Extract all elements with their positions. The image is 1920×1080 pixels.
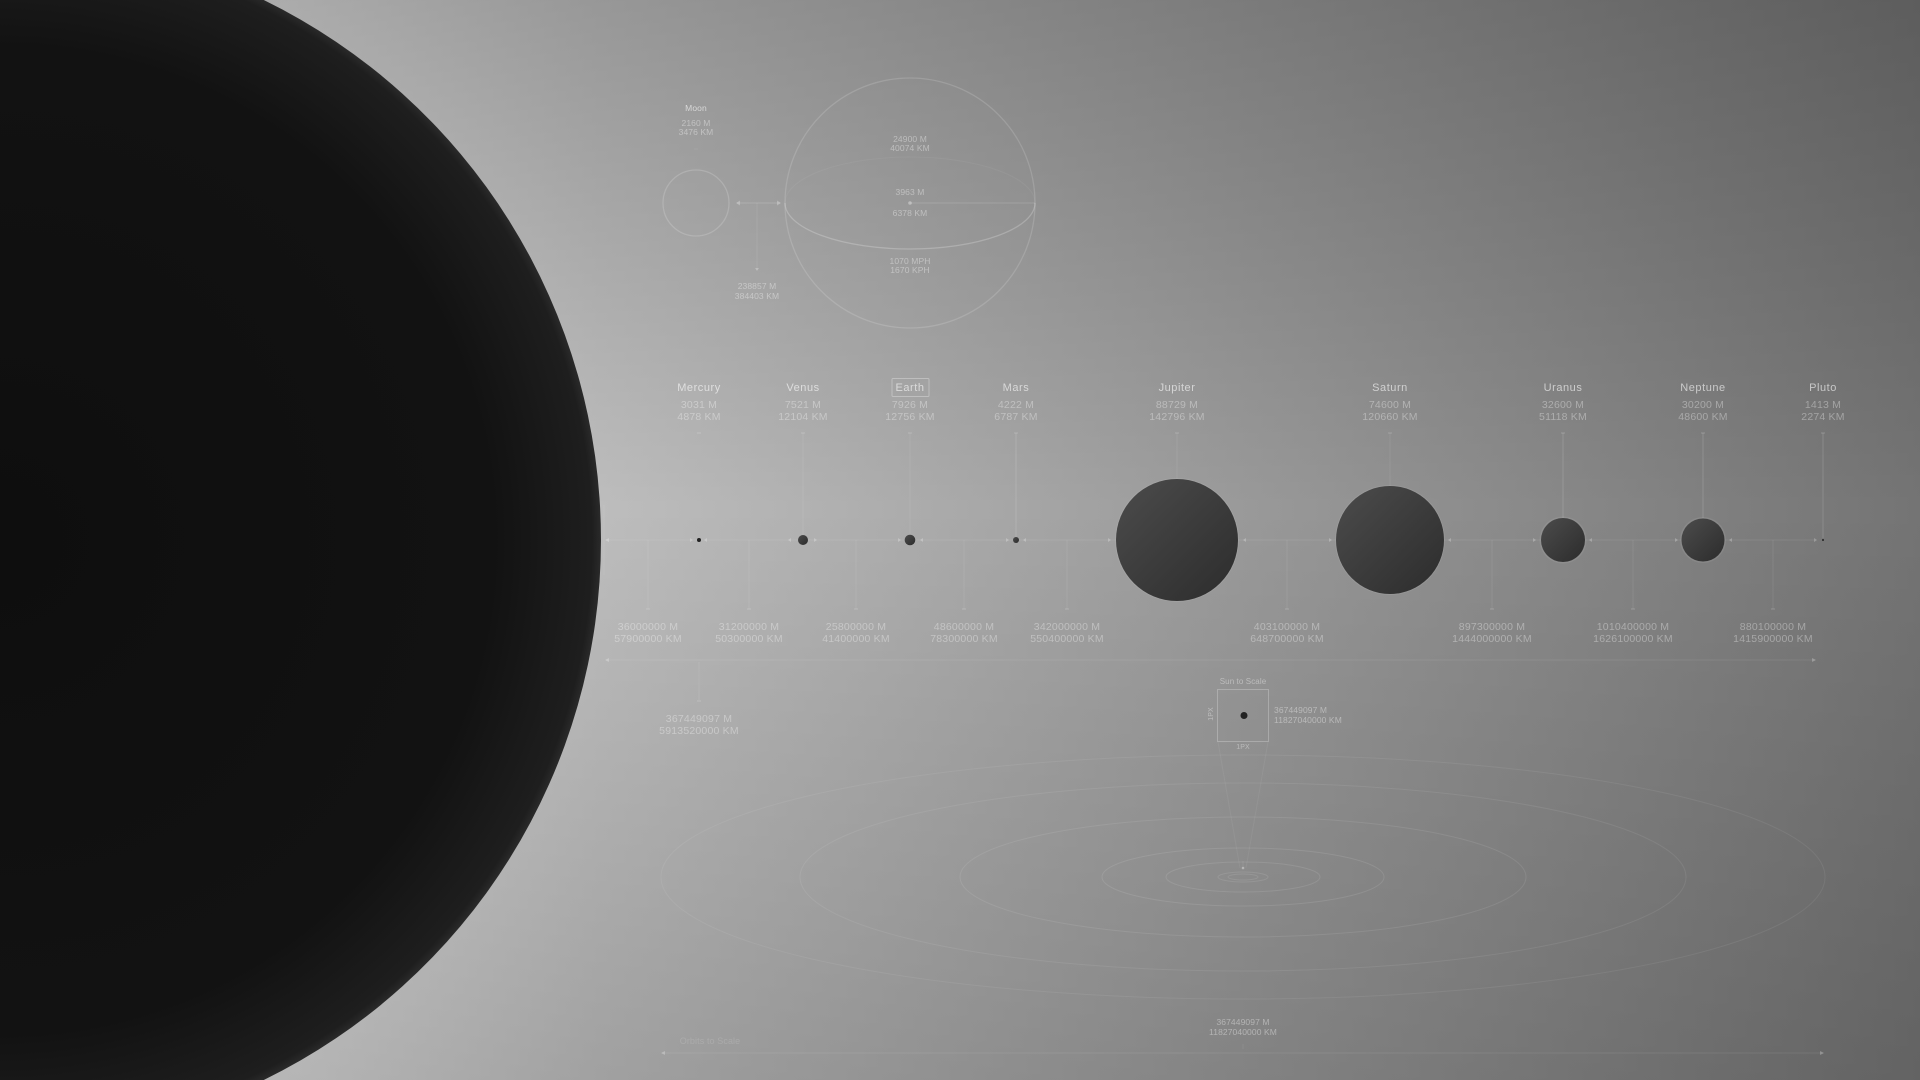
- distance: Saturn to Uranus: 897300000 M: [1459, 621, 1525, 633]
- distance: Mercury to Venus: 50300000 KM: [715, 633, 783, 645]
- orbit: Jupiter: [1166, 862, 1320, 892]
- planet: Mercury: 4878 KM: [677, 411, 721, 423]
- planet: Jupiter: 142796 KM: [1149, 411, 1205, 423]
- distance: Jupiter to Saturn: [1250, 540, 1324, 645]
- distance: Jupiter to Saturn: 403100000 M: [1254, 621, 1320, 633]
- distance: Neptune to Pluto: 880100000 M: [1740, 621, 1806, 633]
- moon diagram: [663, 103, 781, 301]
- distance: Mars to Jupiter: [1030, 540, 1104, 645]
- inset side labels: 1PX: [1236, 744, 1250, 751]
- distance: Neptune to Pluto: 1415900000 KM: [1733, 633, 1813, 645]
- planet: Saturn: Saturn: [1372, 382, 1408, 394]
- planet row axis: [604, 505, 1817, 575]
- distance: Uranus to Neptune: [1593, 540, 1673, 645]
- sun to scale inset: 1PX: [1208, 707, 1215, 721]
- planet: Mars: [994, 382, 1038, 543]
- planet: Neptune: Neptune: [1680, 382, 1726, 394]
- planet: Jupiter: Jupiter: [1159, 382, 1195, 394]
- planet: Saturn: 74600 M: [1369, 399, 1411, 411]
- distance: Saturn to Uranus: [1452, 540, 1532, 645]
- distance: Venus to Earth: 41400000 KM: [822, 633, 890, 645]
- orbit diagram: [661, 755, 1825, 999]
- earth sphere diagram: 6378 KM: [893, 208, 927, 218]
- moon diameter: 2160 M: [682, 118, 710, 128]
- planet: Venus: 12104 KM: [778, 411, 828, 423]
- total distance label: 367449097 M: [666, 713, 732, 725]
- planet: Saturn: [1335, 382, 1445, 595]
- moon label: Moon: [685, 103, 707, 113]
- footer title: Orbits to Scale: [680, 1036, 740, 1046]
- orbit: inner planets: [1218, 872, 1268, 882]
- orbit: Uranus: [960, 817, 1526, 937]
- planet: Earth: Earth: [895, 382, 925, 394]
- moon distance label: 238857 M: [738, 281, 776, 291]
- distance: sun to Mercury: [614, 540, 682, 645]
- sun to scale inset: [1208, 677, 1342, 868]
- radius label: 3963 M: [896, 187, 924, 197]
- planet: Neptune: [1678, 382, 1728, 563]
- earth highlight box: [892, 378, 929, 396]
- planet: Neptune: 30200 M: [1682, 399, 1724, 411]
- distance: Uranus to Neptune: 1626100000 KM: [1593, 633, 1673, 645]
- distance: sun to Mercury: 57900000 KM: [614, 633, 682, 645]
- moon diagram: 384403 KM: [735, 291, 779, 301]
- distance: Mercury to Venus: 31200000 M: [719, 621, 779, 633]
- planet: Venus: 7521 M: [785, 399, 821, 411]
- earth outline: [785, 78, 1035, 328]
- earth sphere diagram: 40074 KM: [890, 143, 930, 153]
- moon circle: [663, 170, 729, 236]
- moon distance line: [737, 202, 780, 204]
- rotation label: 1070 MPH: [890, 256, 930, 266]
- distance: Jupiter to Saturn: 648700000 KM: [1250, 633, 1324, 645]
- planet: Venus: Venus: [786, 382, 820, 394]
- planet: Saturn: 120660 KM: [1362, 411, 1418, 423]
- orbit: Neptune: [800, 783, 1686, 971]
- planet: Jupiter: [1115, 382, 1239, 602]
- zoom lines: [1218, 742, 1268, 868]
- distance: Mars to Jupiter: 550400000 KM: [1030, 633, 1104, 645]
- planet: Earth: 7926 M: [892, 399, 928, 411]
- planet: Jupiter: 88729 M: [1156, 399, 1198, 411]
- distance: Earth to Mars: [930, 540, 998, 645]
- planet: Mercury: 3031 M: [681, 399, 717, 411]
- footer values: 367449097 M: [1216, 1017, 1270, 1027]
- planet: Mercury: Mercury: [677, 382, 721, 394]
- planet: Pluto: 1413 M: [1805, 399, 1841, 411]
- inset title: Sun to Scale: [1220, 677, 1267, 686]
- orbit: Pluto: [661, 755, 1825, 999]
- distance: Saturn to Uranus: 1444000000 KM: [1452, 633, 1532, 645]
- planet: Uranus: 32600 M: [1542, 399, 1584, 411]
- inset square: [1218, 690, 1268, 742]
- sun to scale inset: 11827040000 KM: [1274, 715, 1342, 725]
- distance: Neptune to Pluto: [1733, 540, 1813, 645]
- footer line: [662, 1052, 1823, 1054]
- distance: Mars to Jupiter: 342000000 M: [1034, 621, 1100, 633]
- moon diagram: 3476 KM: [679, 127, 713, 137]
- equator: [785, 203, 1035, 249]
- planet: Mars: 6787 KM: [994, 411, 1038, 423]
- distance labels: [614, 540, 1813, 645]
- distance: Earth to Mars: 48600000 M: [934, 621, 994, 633]
- distance: Earth to Mars: 78300000 KM: [930, 633, 998, 645]
- planet: Venus: [778, 382, 828, 545]
- planet: Mars: Mars: [1003, 382, 1029, 394]
- planet: Pluto: Pluto: [1809, 382, 1837, 394]
- planet: Uranus: Uranus: [1544, 382, 1582, 394]
- circumference label: 24900 M: [893, 134, 927, 144]
- inset values: 367449097 M: [1274, 705, 1327, 715]
- planet: Neptune: 48600 KM: [1678, 411, 1728, 423]
- total distance bar: 5913520000 KM: [659, 725, 739, 737]
- orbits to scale footer: [661, 1017, 1824, 1055]
- planet: Mars: 4222 M: [998, 399, 1034, 411]
- orbits to scale footer: 11827040000 KM: [1209, 1027, 1277, 1037]
- distance: Venus to Earth: [822, 540, 890, 645]
- planet: Uranus: 51118 KM: [1539, 411, 1587, 423]
- sun dot: [1240, 712, 1248, 719]
- planet: Uranus: [1539, 382, 1587, 564]
- planet: Pluto: [1801, 382, 1845, 541]
- distance: Venus to Earth: 25800000 M: [826, 621, 886, 633]
- orbit: Saturn: [1102, 848, 1384, 906]
- total distance bar: [605, 658, 1816, 737]
- planet: Mercury: [677, 382, 721, 542]
- distance: sun to Mercury: 36000000 M: [618, 621, 678, 633]
- sun: [0, 0, 601, 1080]
- earth sphere diagram: [785, 78, 1035, 328]
- planet: Earth: 12756 KM: [885, 411, 935, 423]
- planet: Pluto: 2274 KM: [1801, 411, 1845, 423]
- earth sphere diagram: 1670 KPH: [890, 265, 930, 275]
- distance: Mercury to Venus: [715, 540, 783, 645]
- radius line: [910, 202, 1035, 204]
- planet: Earth: [885, 378, 935, 545]
- distance: Uranus to Neptune: 1010400000 M: [1597, 621, 1669, 633]
